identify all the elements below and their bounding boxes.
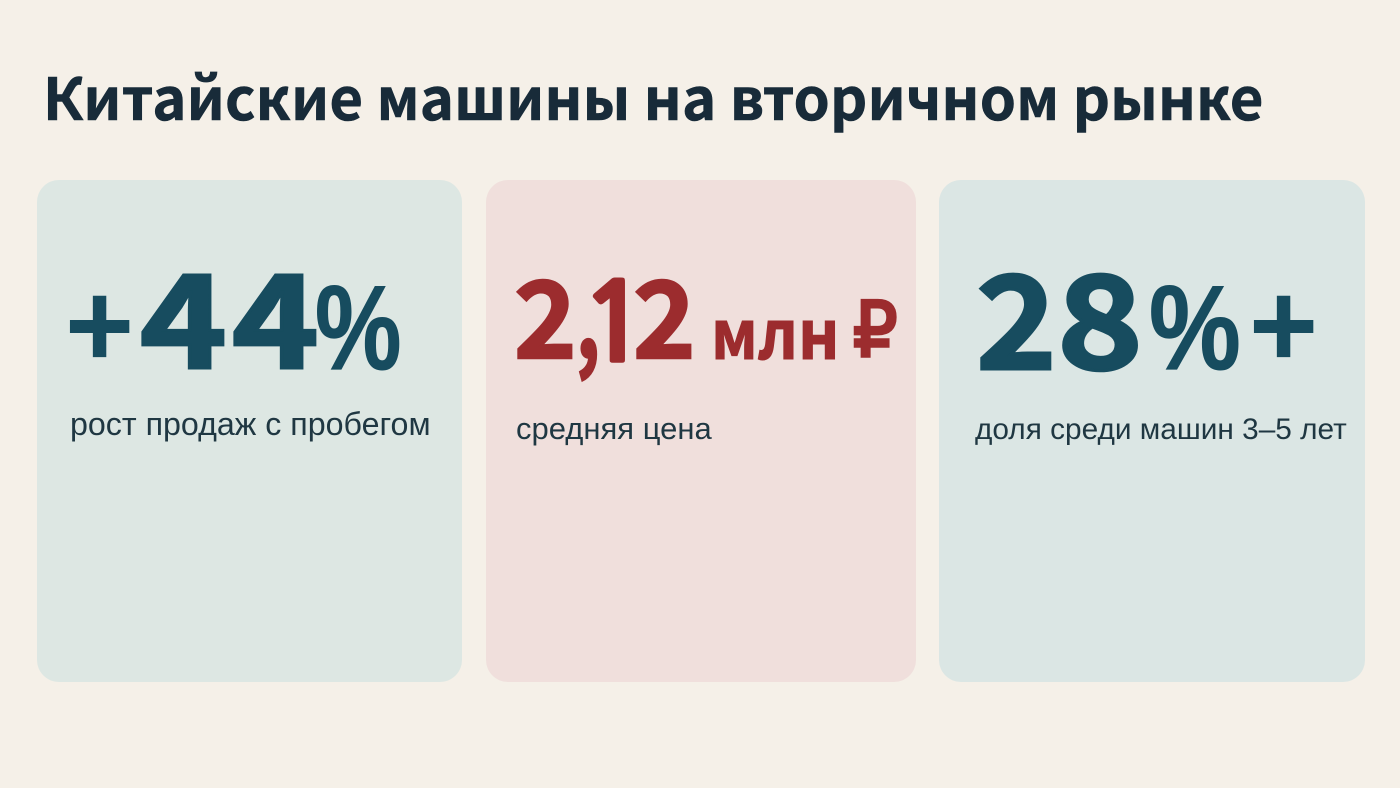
stat: 2,12 mln rub: 1 [579,270,650,378]
stat: 28%+: 2 [976,220,1057,407]
stat: 28%+ [976,220,1317,407]
stat: 28%+: + [1250,236,1317,402]
title: Китайские машины на вторичном рынке [43,53,1264,137]
panel: average price [486,180,916,682]
stat: 2,12 mln rub: 2 [514,235,577,389]
stat: 2,12 mln rub: , [576,235,600,389]
stat: 28%+: 8 [1057,220,1143,407]
stat: 28%+: % [1149,261,1241,395]
stat: +44%: 4 [140,219,227,406]
stat: +44% [66,219,401,406]
panel: share [939,180,1365,682]
stat: 2,12 mln rub: млн [711,280,840,379]
stat: 2,12 mln rub [514,235,897,389]
caption: sales growth: рост продаж с пробегом [70,406,431,442]
stat: 2,12 mln rub: ₽ [853,288,897,373]
caption: share among 3-5 year old cars: доля среди машин 3–5 лет [975,413,1347,446]
caption: average price: средняя цена [516,411,712,446]
panel: sales growth [37,180,462,682]
stat: +44%: + [66,236,133,402]
stat: 2,12 mln rub: 2 [633,235,696,389]
stat: +44%: % [315,261,401,395]
stat: +44%: 4 [232,219,319,406]
